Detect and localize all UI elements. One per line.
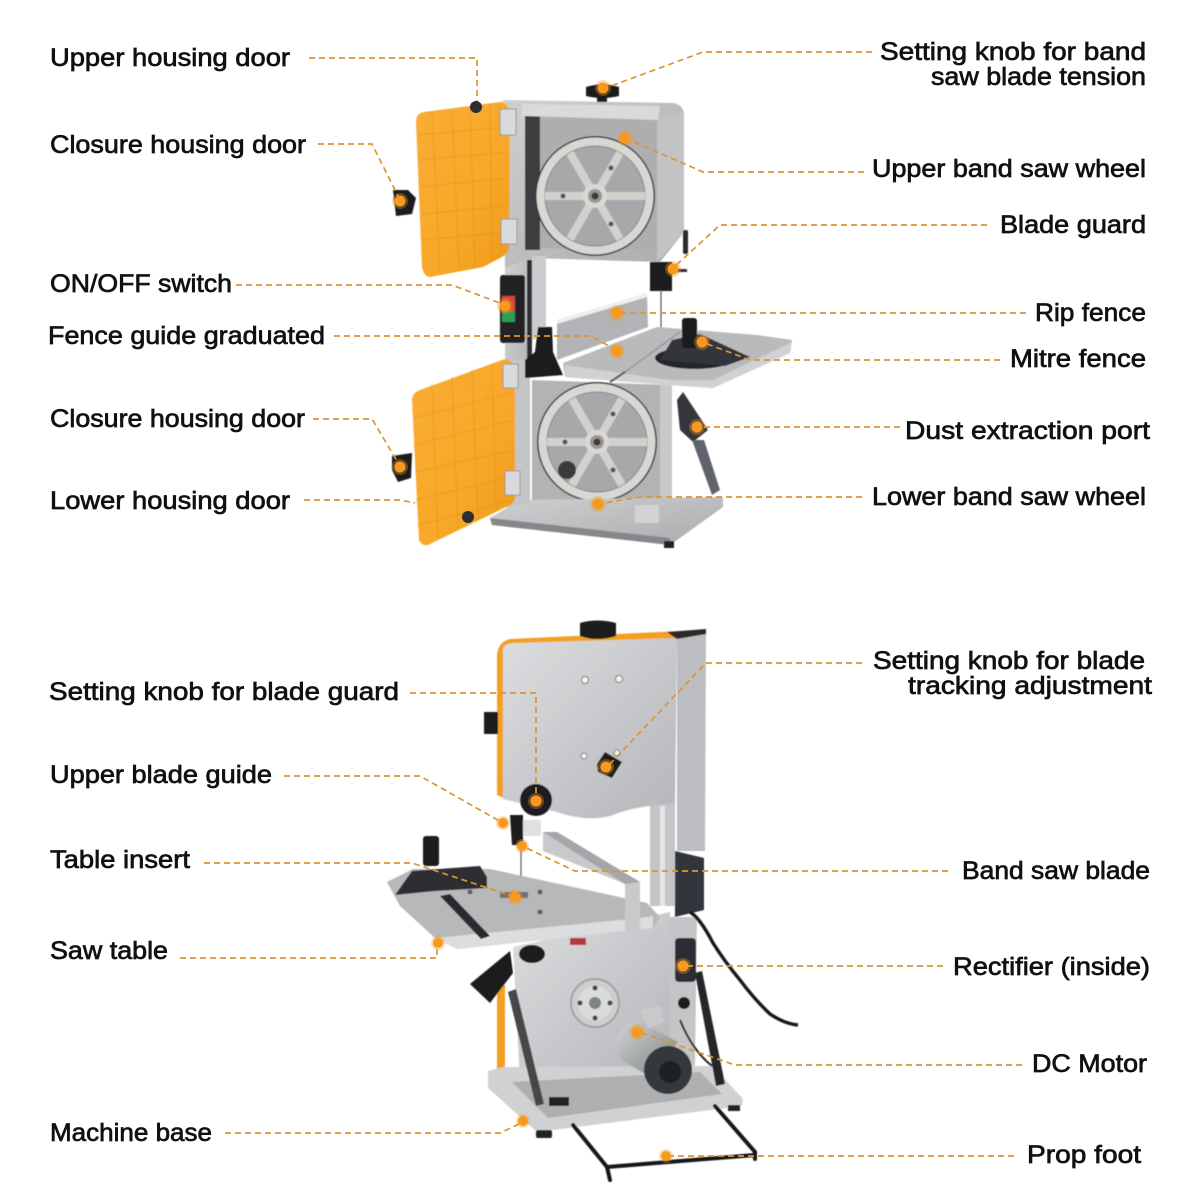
callout: Rip fence: [609, 299, 1146, 327]
door hinges: [500, 109, 520, 495]
callout: Upper housing door: [50, 44, 482, 113]
upper blade guide: [510, 815, 523, 845]
machine base top: [490, 497, 723, 545]
callout: Mitre fence: Mitre fence: [1010, 345, 1146, 373]
orange door edge: [497, 631, 680, 800]
callout: Closure housing door (top): Closure housing door: [50, 131, 306, 159]
callout: Lower band saw wheel: [590, 483, 1146, 512]
callout: Prop foot: Prop foot: [1027, 1141, 1141, 1169]
head panel: [503, 638, 677, 818]
lower door: [412, 359, 515, 545]
callout: Band saw blade: [515, 839, 1150, 885]
lower cabinet: [513, 912, 670, 1080]
motor: [617, 1022, 678, 1078]
callout: Fence guide graduated: Fence guide graduated: [48, 322, 325, 350]
callout: Setting knob for blade tracking adjustment: tracking adjustment: [908, 672, 1152, 700]
callout: Upper blade guide: [50, 761, 510, 830]
callout: Table insert: Table insert: [50, 846, 190, 874]
callout: Saw table: [50, 936, 445, 965]
door knob lower: [392, 453, 412, 482]
blade guard knob: [520, 784, 552, 816]
callout: Upper band saw wheel: Upper band saw wheel: [872, 155, 1146, 183]
upper door: [416, 102, 510, 277]
callout: Upper band saw wheel: [617, 130, 1146, 183]
mitre gauge: [655, 347, 735, 369]
callout: Setting knob for blade tracking adjustment: [598, 647, 1152, 775]
lower column: [505, 258, 530, 507]
callout: DC Motor: DC Motor: [1032, 1050, 1147, 1078]
callout: Saw table: Saw table: [50, 937, 168, 965]
bottom band saw, rear view: [387, 620, 798, 1180]
callout: Upper housing door: Upper housing door: [50, 44, 290, 72]
switch box: [675, 851, 704, 917]
callout: Setting knob for band saw blade tension: [595, 38, 1146, 96]
callout: Setting knob for band saw blade tension: saw blade tension: [931, 63, 1146, 91]
saw table: [563, 327, 792, 388]
door knob upper: [393, 190, 416, 216]
tension knob: [586, 84, 619, 102]
table slot: [440, 894, 490, 939]
prop foot: [573, 1106, 755, 1180]
callout: Dust extraction port: Dust extraction port: [905, 417, 1150, 445]
lower band saw wheel: [537, 382, 657, 502]
callout: Fence guide graduated: [48, 322, 625, 359]
dust extraction port: [677, 392, 708, 442]
callout: Setting knob for blade guard: [49, 678, 544, 809]
column front: [505, 360, 530, 505]
mitre gauge rear: [395, 866, 487, 895]
upper housing frame: [503, 100, 684, 270]
blade guard assembly: [650, 262, 672, 291]
callout: Setting knob for blade guard: Setting knob for blade guard: [49, 678, 399, 706]
tracking knob: [597, 752, 622, 778]
callout: Rectifier (inside): [675, 953, 1150, 981]
under table knob: [519, 945, 545, 963]
power cable: [690, 912, 798, 1025]
callout: DC Motor: [629, 1024, 1147, 1078]
callout: Machine base: [50, 1114, 530, 1147]
callout: Lower housing door: Lower housing door: [50, 487, 290, 515]
dust port: [470, 951, 513, 1003]
callout: Setting knob for band saw blade tension: Setting knob for band: [880, 38, 1146, 66]
callout: Blade guard: Blade guard: [1000, 211, 1146, 239]
callout: Setting knob for blade tracking adjustment: Setting knob for blade: [873, 647, 1145, 675]
upper band saw wheel: [535, 136, 655, 256]
lower housing body: [532, 380, 668, 510]
callout: ON/OFF switch: ON/OFF switch: [50, 270, 232, 298]
callout: Table insert: [50, 846, 523, 905]
callout: Closure housing door (top): [50, 131, 408, 209]
rectifier box: [675, 938, 696, 982]
callout: Mitre fence: [694, 334, 1146, 373]
rip fence: [557, 293, 648, 360]
callout: Rectifier (inside): Rectifier (inside): [953, 953, 1150, 981]
on off switch: [500, 275, 525, 343]
right column: [677, 632, 706, 851]
callout: Prop foot: [659, 1141, 1141, 1169]
callout: Dust extraction port: [689, 417, 1150, 445]
callout: ON/OFF switch: [50, 270, 513, 314]
callout: Lower band saw wheel: Lower band saw wheel: [872, 483, 1146, 511]
saw table rear: [387, 869, 660, 949]
callout: Machine base: Machine base: [50, 1119, 212, 1147]
callout: Upper blade guide: Upper blade guide: [50, 761, 272, 789]
upper housing interior: [525, 116, 658, 250]
blade: [520, 840, 522, 888]
panel holes: [581, 676, 622, 759]
rip fence rear: [543, 832, 640, 932]
fence bracket: [525, 327, 563, 378]
pulley: [571, 979, 619, 1027]
callout: Closure housing door (bottom): [50, 405, 408, 475]
callout: Rip fence: Rip fence: [1035, 299, 1146, 327]
base: [488, 1066, 743, 1132]
top knob: [580, 620, 616, 639]
legs: [508, 989, 544, 1106]
callout: Band saw blade: Band saw blade: [962, 857, 1150, 885]
inner column: [650, 803, 675, 906]
callout: Lower housing door: [50, 487, 474, 523]
top band saw, doors open: [392, 84, 792, 548]
callout: Blade guard: [665, 211, 1146, 277]
callout: Closure housing door (bottom): Closure housing door: [50, 405, 305, 433]
